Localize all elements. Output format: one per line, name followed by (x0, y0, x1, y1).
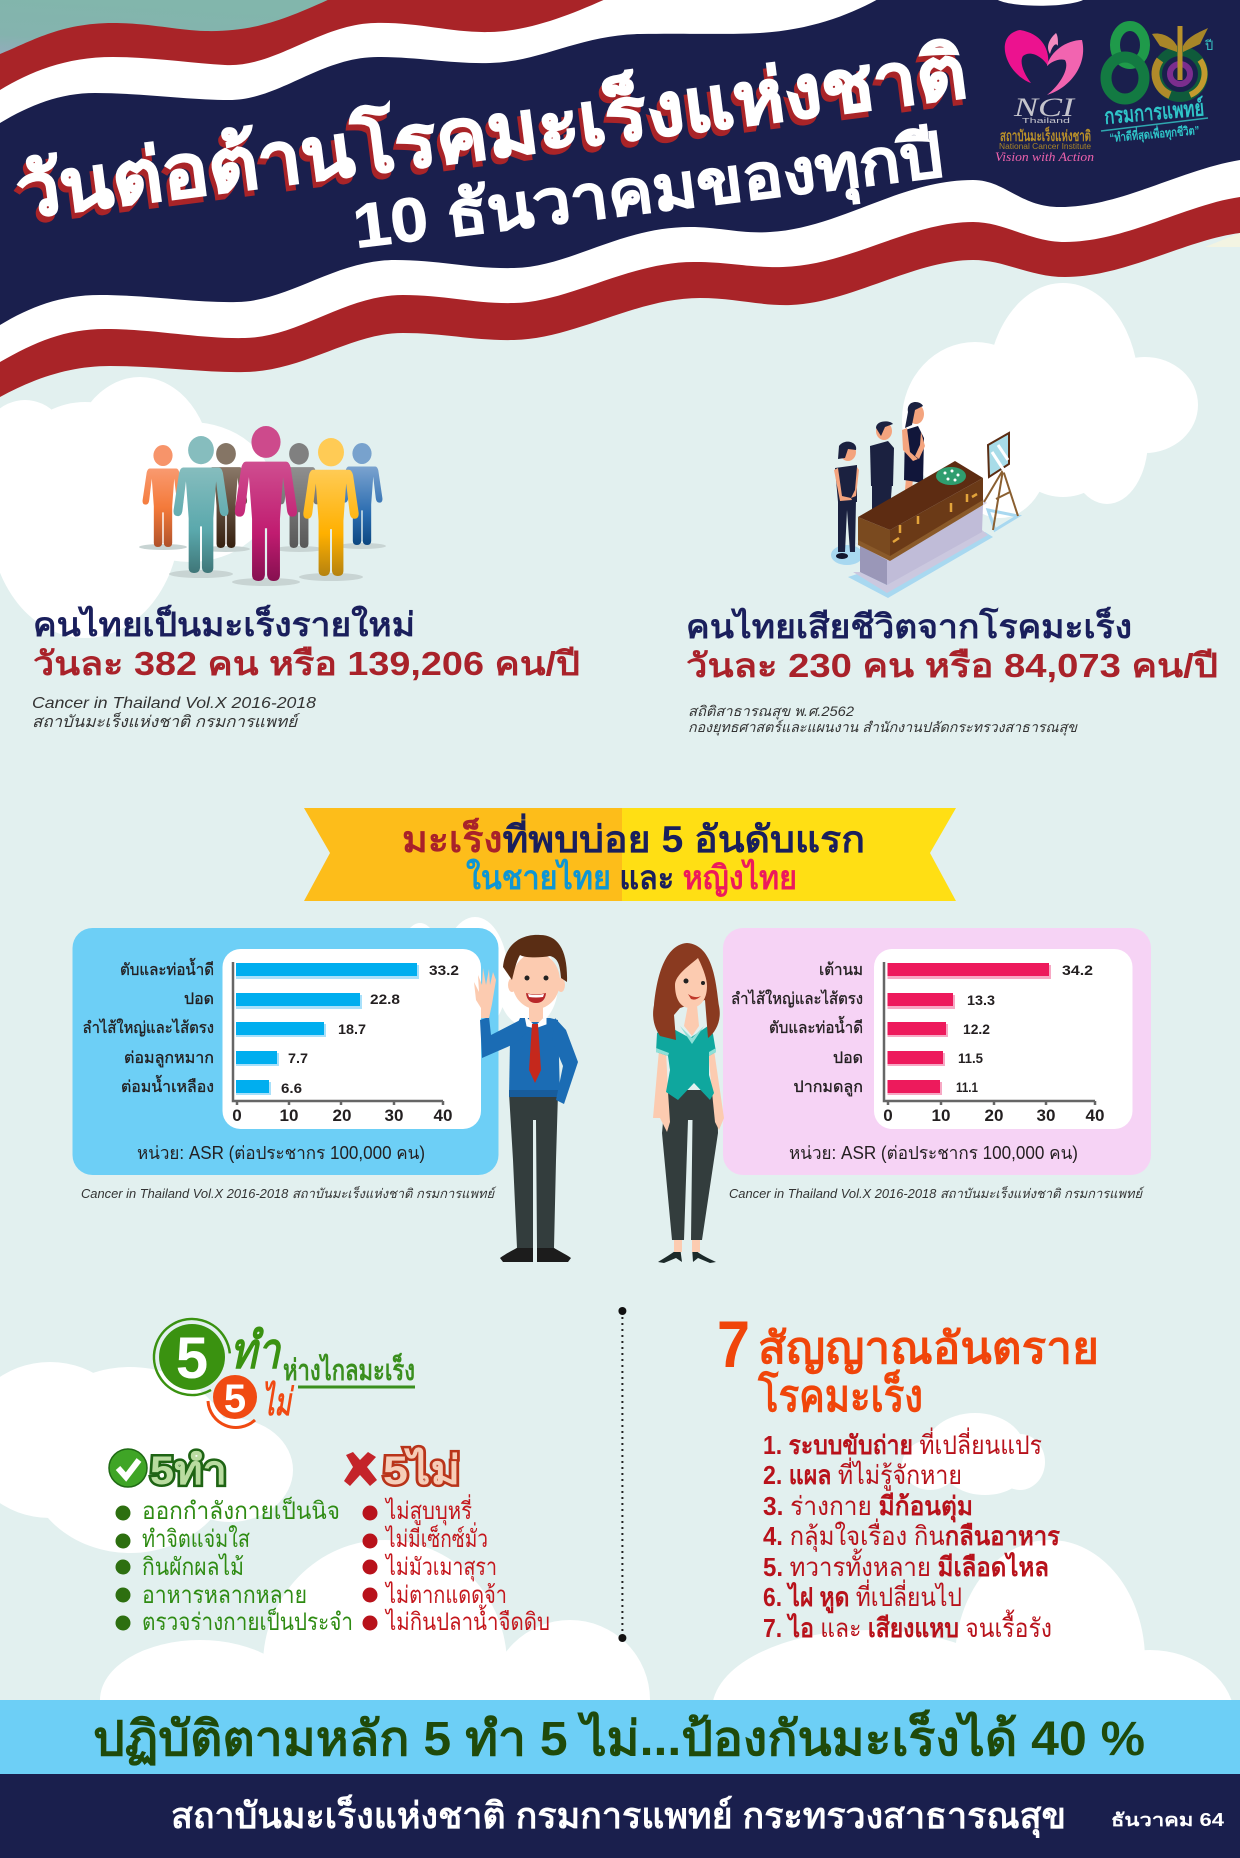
heading: 7 warning signs: โรคมะเร็ง (757, 1369, 923, 1421)
male chart labels (82, 958, 214, 1096)
list: 7 warning signs: 4. กลุ้มใจเรื่อง กินกลืนอาหาร (763, 1518, 1060, 1552)
illustration: woman (653, 943, 724, 1263)
icon: crowd of people (139, 426, 386, 586)
male chart unit: หน่วย: ASR (ต่อประชากร 100,000 คน) (137, 1143, 425, 1163)
footer (0, 1774, 1240, 1858)
female bar chart: 40 (1086, 1106, 1104, 1125)
male bar chart: 0 (232, 1106, 242, 1125)
female bar chart (883, 962, 1104, 1125)
list: 5 don't: ไม่ตากแดดจ้า (384, 1581, 507, 1609)
ribbon banner: top 5 cancers: มะเร็งที่พบบ่อย 5 อันดับแรก (402, 813, 865, 860)
male chart labels: ต่อมลูกหมาก (124, 1050, 214, 1068)
list: 7 warning signs (763, 1427, 1060, 1643)
orange 5 badge (208, 1375, 257, 1427)
logo: 80 years Department of Medical Services: ปี (1204, 38, 1213, 53)
male bar chart: 30 (385, 1106, 403, 1125)
band: prevention message: ปฏิบัติตามหลัก 5 ทำ 5 ไม่...ป้องกันมะเร็งได้ 40 % (93, 1709, 1145, 1766)
female chart labels: ลำไส้ใหญ่และไส้ตรง (731, 989, 863, 1008)
heading: 5 do: 5ทำ (150, 1449, 227, 1493)
new cases source: สถาบันมะเร็งแห่งชาติ กรมการแพทย์ (32, 712, 300, 731)
new cases source (32, 695, 316, 731)
easel with portrait (984, 433, 1018, 530)
female bar chart: 0 (883, 1106, 893, 1125)
heading: cancer deaths (686, 606, 1218, 736)
green 5 badge (140, 1305, 244, 1409)
coffin plinth (853, 498, 988, 593)
do label: ทำ (230, 1323, 282, 1379)
deaths source: กองยุทธศาสตร์และแผนงาน สำนักงานปลัดกระทรวงสาธารณสุข (688, 719, 1078, 736)
list: 5 don't: ไม่มีเซ็กซ์มั่ว (384, 1522, 488, 1553)
female bar chart: 34.2 (1062, 962, 1093, 978)
female bar chart: 10 (932, 1106, 950, 1125)
male bar chart (232, 962, 459, 1125)
female bar chart: 11.5 (958, 1050, 983, 1066)
logo: 80 years Department of Medical Services (1101, 26, 1213, 146)
list: 5 don't: ไม่กินปลาน้ำจืดดิบ (384, 1604, 550, 1636)
list: 7 warning signs: 1. ระบบขับถ่าย ที่เปลี่ยนแปร (763, 1427, 1042, 1460)
wreath (936, 467, 966, 485)
female chart source: Cancer in Thailand Vol.X 2016-2018 สถาบันมะเร็งแห่งชาติ กรมการแพทย์ (729, 1185, 1145, 1201)
heading: 5 don't: 5ไม่ (383, 1447, 460, 1493)
footer: ธันวาคม 64 (1111, 1810, 1224, 1830)
heading: 7 warning signs: 7 (717, 1307, 750, 1381)
male chart labels: ปอด (184, 991, 214, 1008)
logo: 5 do 5 don't (140, 1305, 415, 1427)
new cases figures: วันละ 382 คน หรือ 139,206 คน/ปี (33, 645, 580, 682)
band: prevention message (0, 1700, 1240, 1774)
female chart unit: หน่วย: ASR (ต่อประชากร 100,000 คน) (789, 1143, 1078, 1163)
list: 5 do: ตรวจร่างกายเป็นประจำ (142, 1607, 353, 1636)
female bar chart: 13.3 (967, 992, 995, 1008)
male bar chart: 6.6 (281, 1080, 302, 1096)
ribbon banner: top 5 cancers (304, 808, 956, 901)
panel: male cancers chart (72, 928, 498, 1201)
title line 2: 10 ธันวาคมของทุกปี (349, 121, 947, 265)
male bar chart: 7.7 (288, 1050, 308, 1066)
logo: National Cancer Institute: NCI (1013, 93, 1076, 122)
orange 5 badge: 5 (224, 1377, 246, 1421)
dotted divider (618, 1307, 626, 1642)
footer: สถาบันมะเร็งแห่งชาติ กรมการแพทย์ กระทรวงสาธารณสุข (171, 1793, 1066, 1839)
heading: 7 warning signs: สัญญาณอันตราย (758, 1324, 1099, 1374)
logo: National Cancer Institute: Thailand (1022, 118, 1070, 125)
heading: 7 warning signs (717, 1307, 1099, 1421)
logo: National Cancer Institute: National Cancer Institute (999, 142, 1092, 151)
list: 5 do: กินผักผลไม้ (142, 1553, 244, 1581)
male bar chart: 40 (434, 1106, 452, 1125)
icon: green check (109, 1449, 147, 1487)
coffin (858, 461, 983, 561)
icon: red cross (344, 1452, 377, 1486)
male chart source: Cancer in Thailand Vol.X 2016-2018 สถาบันมะเร็งแห่งชาติ กรมการแพทย์ (81, 1185, 497, 1201)
ribbon banner: top 5 cancers: ในชายไทย และ หญิงไทย (466, 858, 797, 897)
male chart labels: ต่อมน้ำเหลือง (121, 1075, 214, 1096)
keep away from cancer: ห่างไกลมะเร็ง (283, 1352, 415, 1387)
new cases source: Cancer in Thailand Vol.X 2016-2018 (32, 695, 316, 712)
deaths figures: วันละ 230 คน หรือ 84,073 คน/ปี (686, 647, 1218, 684)
list: 5 don't (362, 1494, 550, 1636)
panel: female cancers chart (723, 928, 1151, 1201)
woman mourner left (834, 442, 859, 559)
deaths source: สถิติสาธารณสุข พ.ศ.2562 (688, 703, 854, 720)
logo: National Cancer Institute (995, 30, 1094, 164)
list: 5 do: ออกกำลังกายเป็นนิจ (142, 1496, 340, 1525)
heading: new cancer patients (32, 604, 580, 731)
list: 7 warning signs: 3. ร่างกาย มีก้อนตุ่ม (763, 1491, 973, 1523)
logo: National Cancer Institute: Vision with Action (995, 149, 1094, 164)
list: 5 do: อาหารหลากหลาย (142, 1582, 307, 1609)
female bar chart: 30 (1037, 1106, 1055, 1125)
logo: 80 years Department of Medical Services: “ทำดีที่สุดเพื่อทุกชีวิต” (1109, 121, 1200, 146)
don't label: ไม่ (262, 1380, 294, 1424)
male bar chart: 10 (280, 1106, 298, 1125)
flag waves header (0, 0, 1240, 520)
female chart labels (731, 961, 863, 1097)
female chart labels: เต้านม (819, 961, 863, 979)
list: 5 don't: ไม่สูบบุหรี่ (384, 1494, 472, 1526)
female chart labels: ตับและท่อน้ำดี (769, 1016, 863, 1037)
female bar chart: 12.2 (963, 1021, 990, 1037)
deaths title: คนไทยเสียชีวิตจากโรคมะเร็ง (686, 606, 1132, 645)
deaths source (688, 703, 1078, 736)
list: 5 do: ทำจิตแจ่มใส (142, 1525, 250, 1553)
list: 7 warning signs: 2. แผล ที่ไม่รู้จักหาย (763, 1457, 962, 1491)
title (8, 28, 971, 265)
title line 1 shadow: วันต่อต้านโรคมะเร็งแห่งชาติ (8, 34, 968, 240)
female bar chart: 20 (985, 1106, 1003, 1125)
man mourner (870, 421, 894, 515)
title line 1: วันต่อต้านโรคมะเร็งแห่งชาติ (11, 28, 971, 234)
list: 7 warning signs: 6. ไฝ หูด ที่เปลี่ยนไป (763, 1579, 962, 1614)
icon: funeral with coffin (831, 402, 1018, 598)
list: 5 don't: ไม่มัวเมาสุรา (384, 1553, 497, 1582)
male bar chart: 22.8 (370, 991, 400, 1007)
list: 7 warning signs: 5. ทวารทั้งหลาย มีเลือดไหล (763, 1548, 1049, 1582)
woman mourner right (902, 402, 925, 490)
male chart labels: ตับและท่อน้ำดี (120, 958, 214, 979)
female chart labels: ปากมดลูก (794, 1079, 863, 1097)
list: 5 do (116, 1496, 353, 1636)
logo: 80 years Department of Medical Services: กรมการแพทย์ (1103, 95, 1205, 129)
male chart labels: ลำไส้ใหญ่และไส้ตรง (82, 1018, 214, 1037)
female bar chart: 11.1 (956, 1079, 978, 1095)
female chart labels: ปอด (833, 1050, 863, 1067)
male bar chart: 20 (333, 1106, 351, 1125)
list: 7 warning signs: 7. ไอ และ เสียงแหบ จนเรื้อรัง (763, 1609, 1052, 1643)
logo: National Cancer Institute: สถาบันมะเร็งแห่งชาติ (1000, 126, 1091, 145)
male bar chart: 33.2 (429, 962, 459, 978)
green 5 badge: 5 (176, 1326, 208, 1391)
new cases title: คนไทยเป็นมะเร็งรายใหม่ (33, 604, 415, 643)
male bar chart: 18.7 (338, 1021, 366, 1037)
illustration: man (474, 935, 578, 1262)
